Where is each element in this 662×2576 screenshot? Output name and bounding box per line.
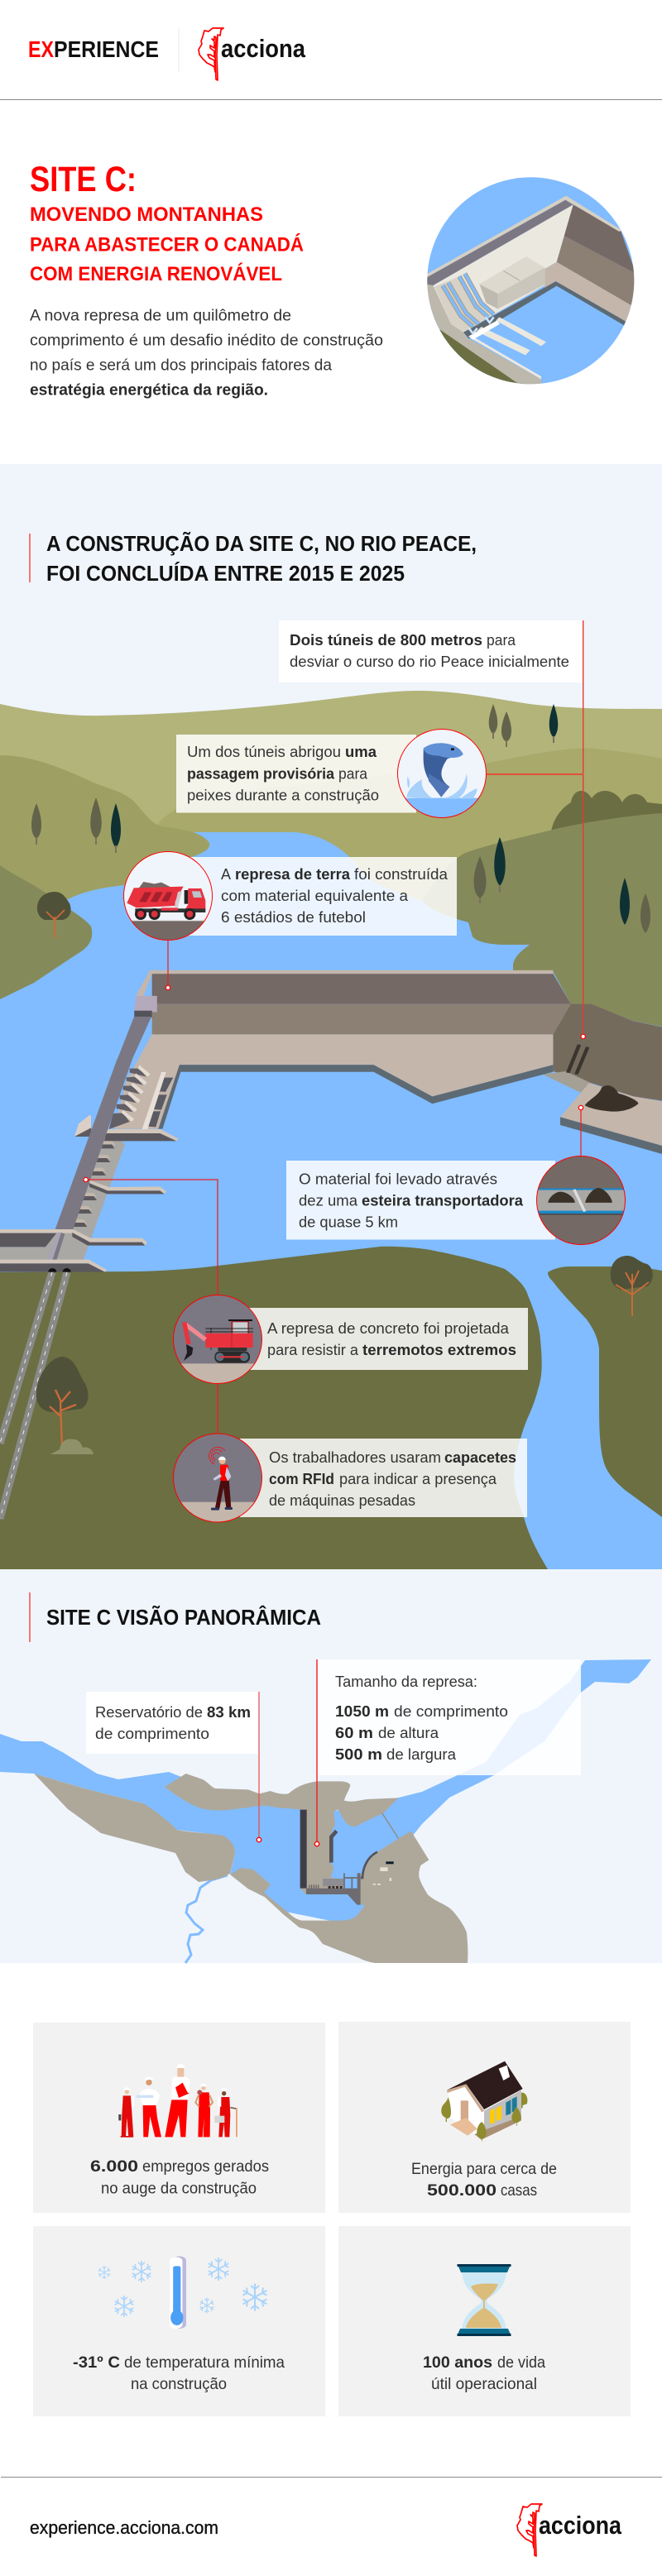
page header [0, 27, 662, 100]
text: temperature [73, 2353, 285, 2393]
heading: construction: A CONSTRUÇÃO DA SITE C, NO RIO PEACE, [46, 531, 477, 556]
tree lower left [36, 1357, 94, 1454]
callout: fish passage: peixes durante a construção [187, 786, 379, 804]
marker line: concrete dam [86, 1180, 218, 1434]
callout: earth dam [186, 857, 457, 936]
callout: dam size: de largura [386, 1745, 457, 1763]
spillway structures [0, 1059, 179, 1272]
map water [0, 1659, 651, 1927]
intro paragraph: comprimento é um desafio inédito de construção [30, 331, 383, 349]
text: lifespan [423, 2353, 545, 2393]
callout: dam size: Tamanho da represa: [335, 1673, 477, 1690]
callout line: reservoir [258, 1692, 260, 1840]
callout: earth dam: 6 estádios de futebol [221, 908, 366, 926]
callout: concrete dam: A represa de concreto foi projetada [267, 1319, 510, 1337]
lower left hill [0, 865, 92, 999]
callout: concrete dam [240, 1308, 528, 1370]
callout: reservoir [86, 1692, 258, 1754]
right bottom land [548, 1266, 662, 1517]
marker: conveyor [578, 1105, 583, 1110]
callout: reservoir: de comprimento [95, 1725, 209, 1742]
dam road upper [118, 1017, 151, 1059]
dam main structure [114, 970, 662, 1154]
callout: concrete dam: para resistir a [267, 1341, 359, 1358]
text: homes: Energia para cerca de [411, 2160, 557, 2178]
intro paragraph: no país e será um dos principais fatores da [30, 356, 332, 374]
text: homes: casas [501, 2181, 537, 2200]
icon: workers [118, 2064, 237, 2138]
middle hill [158, 748, 662, 1075]
footer url: experience.acciona.com [30, 2517, 218, 2538]
bottom land [0, 1247, 548, 1569]
callout: dam size [318, 1659, 581, 1775]
callout: RFID helmets: Os trabalhadores usaram [269, 1448, 441, 1466]
callout: RFID helmets: de máquinas pesadas [269, 1491, 415, 1509]
marker: embankment [166, 985, 170, 990]
callout: fish passage: para [338, 764, 368, 783]
icon: hourglass [457, 2264, 511, 2336]
title: SITE C: [30, 160, 137, 199]
logo: acciona [199, 28, 306, 80]
icons: snowflakes [98, 2258, 267, 2317]
subtitle [30, 203, 304, 285]
callout: tunnels: para [487, 631, 516, 649]
callout: conveyor [286, 1161, 555, 1239]
trees [31, 704, 650, 933]
footer logo: acciona [539, 2511, 622, 2540]
text: lifespan: 100 anos [423, 2353, 492, 2372]
subtitle: MOVENDO MONTANHAS [30, 203, 263, 226]
stat card: temperature [33, 2226, 325, 2416]
right hill [422, 813, 662, 1027]
callout: earth dam: com material equivalente a [221, 887, 409, 904]
left hill [0, 755, 209, 918]
callout: conveyor: esteira transportadora [362, 1191, 524, 1209]
section: panoramic view [0, 1569, 662, 1963]
river water [0, 832, 662, 1569]
text: lifespan: de vida [497, 2353, 545, 2372]
section: construction landscape [0, 464, 662, 1569]
callout line: dam size [316, 1659, 318, 1844]
callout: reservoir: Reservatório de [95, 1703, 203, 1721]
callout: reservoir: 83 km [207, 1703, 251, 1721]
intro paragraph [30, 306, 383, 399]
intro text block [30, 160, 383, 399]
line: embankment [167, 940, 169, 988]
text: temperature: de temperatura mínima [124, 2353, 285, 2372]
heading: construction: FOI CONCLUÍDA ENTRE 2015 E 2025 [46, 561, 405, 586]
callout: dam size: 1050 m [335, 1702, 389, 1720]
subtitle: COM ENERGIA RENOVÁVEL [30, 262, 282, 285]
text: lifespan: útil operacional [431, 2375, 537, 2393]
subtitle: PARA ABASTECER O CANADÁ [30, 233, 304, 256]
back hills [0, 691, 662, 1075]
callout: tunnels: Dois túneis de 800 metros [290, 631, 482, 649]
callout: conveyor: de quase 5 km [299, 1213, 398, 1231]
icon: dump truck [122, 852, 213, 942]
text: temperature: na construção [131, 2375, 227, 2393]
text: jobs: 6.000 [90, 2157, 138, 2176]
line: conveyor [580, 1108, 582, 1156]
footer [1, 2477, 662, 2556]
wordmark: EXPERIENCE: PERIENCE [54, 36, 159, 62]
icon: excavator [171, 1295, 265, 1386]
stat card: homes [338, 2022, 631, 2213]
text: jobs [90, 2157, 269, 2197]
callout: RFID helmets: com RFId [269, 1470, 334, 1487]
stat card: jobs [33, 2023, 325, 2213]
heading: construction [29, 531, 477, 586]
marker: tunnels [581, 1034, 585, 1039]
access roads [0, 1272, 67, 1519]
callout: conveyor: dez uma [299, 1191, 358, 1209]
intro paragraph: A nova represa de um quilômetro de [30, 306, 291, 324]
callout: fish passage: uma [345, 743, 377, 760]
logo: acciona: acciona [221, 34, 306, 63]
callout: fish passage [176, 735, 416, 812]
vertical line: tunnels [583, 620, 584, 1037]
icon: conveyor belt [534, 1156, 627, 1244]
callout: dam size: de altura [378, 1724, 439, 1741]
callout: dam size: 60 m [335, 1724, 373, 1741]
map and structures [165, 1774, 468, 1963]
small river [185, 1875, 228, 1963]
icon: thermometer [170, 2256, 186, 2329]
marker: reservoir [257, 1837, 261, 1842]
callout: dam size: 500 m [335, 1745, 382, 1763]
map land west [34, 1774, 235, 1882]
dark bushes on right [551, 791, 662, 844]
text: homes: 500.000 [427, 2181, 496, 2200]
connector: fish [484, 773, 583, 775]
icon: leaping fish [397, 730, 487, 819]
stat card: lifespan [338, 2226, 631, 2416]
marker: dam size [314, 1841, 319, 1846]
icon: worker with RFID helmet [171, 1434, 265, 1524]
callout: tunnels: desviar o curso do rio Peace inicialmente [290, 653, 569, 670]
tree right [611, 1256, 653, 1316]
callout: RFID helmets [240, 1439, 527, 1517]
icon: house [441, 2061, 527, 2141]
callout: earth dam: foi construída [354, 865, 449, 883]
callout: earth dam: represa de terra [235, 865, 351, 883]
callout: tunnels [279, 620, 583, 682]
callout: concrete dam: terremotos extremos [362, 1341, 516, 1358]
callout: conveyor: O material foi levado através [299, 1170, 497, 1188]
round tree lower left hill [37, 892, 71, 938]
callout: RFID helmets: capacetes [444, 1448, 516, 1466]
callout: fish passage: Um dos túneis abrigou [187, 743, 341, 760]
callout: earth dam: A [221, 865, 232, 883]
callout: fish passage: passagem provisória [187, 764, 335, 783]
text: homes [411, 2160, 557, 2200]
text: jobs: no auge da construção [101, 2179, 257, 2197]
marker: concrete dam [84, 1177, 88, 1182]
callout: RFID helmets: para indicar a presença [339, 1470, 497, 1487]
text: temperature: -31º C [73, 2353, 120, 2372]
callout: dam size: de comprimento [394, 1702, 508, 1720]
hero circle: dam aerial view [422, 174, 639, 391]
footer logo [517, 2504, 622, 2556]
heading: panoramic: SITE C VISÃO PANORÂMICA [46, 1605, 321, 1630]
text: jobs: empregos gerados [142, 2157, 269, 2176]
intro paragraph: estratégia energética da região. [30, 381, 268, 399]
wordmark: EXPERIENCE: EX [28, 36, 54, 62]
